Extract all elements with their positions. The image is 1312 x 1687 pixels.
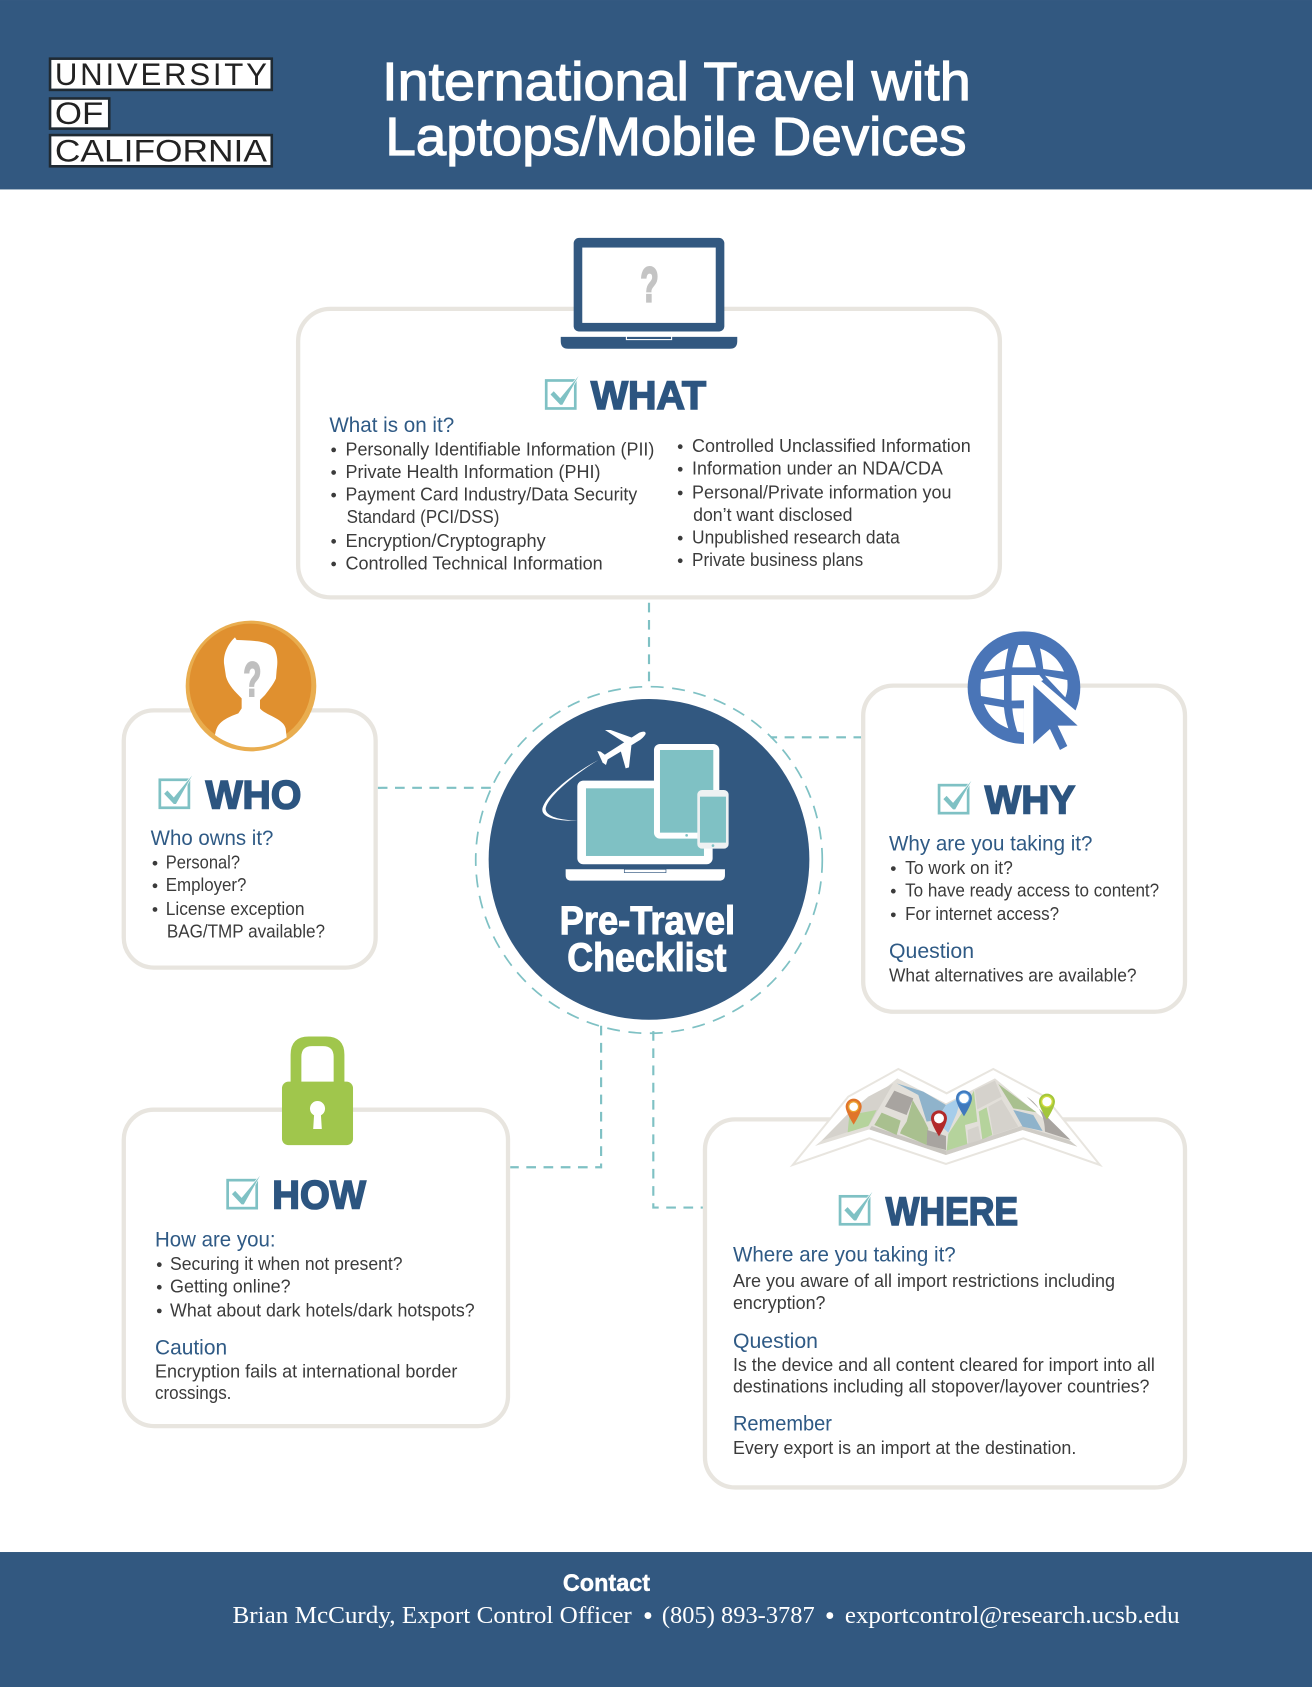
icon: globe with cursor bbox=[968, 631, 1087, 750]
how caution: Encryption fails at international border bbox=[155, 1361, 457, 1382]
what list: right column: Information under an NDA/CDA bbox=[692, 458, 944, 479]
who subheading: Who owns it? bbox=[151, 826, 273, 850]
who panel frame bbox=[124, 710, 376, 968]
where question bbox=[733, 1329, 1155, 1397]
connector: who to centre bbox=[378, 787, 491, 789]
footer contact text: (805) 893-3787 bbox=[662, 1602, 815, 1629]
who list: BAG/TMP available? bbox=[167, 920, 325, 941]
why heading: WHY bbox=[985, 779, 1075, 823]
icon: laptop with question mark: ? bbox=[640, 257, 659, 312]
what list: right column: don’t want disclosed bbox=[693, 504, 852, 525]
how list: What about dark hotels/dark hotspots? bbox=[170, 1299, 475, 1320]
what list: left column: Payment Card Industry/Data Security bbox=[345, 483, 638, 504]
why list: For internet access? bbox=[905, 903, 1059, 924]
what list: right column: Unpublished research data bbox=[692, 527, 901, 548]
what list: left column: Controlled Technical Information bbox=[345, 552, 603, 573]
why subheading: Why are you taking it? bbox=[889, 832, 1092, 856]
what list: left column bbox=[331, 438, 654, 573]
connector: how to centre bbox=[510, 1026, 601, 1167]
logo: University of California bbox=[50, 57, 272, 168]
why heading bbox=[939, 779, 1075, 823]
what list: left column: Private Health Information (PHI) bbox=[345, 461, 601, 482]
where subheading and text: Are you aware of all import restrictions including bbox=[733, 1270, 1115, 1291]
what list: right column: Personal/Private information you bbox=[692, 481, 951, 502]
title: International Travel with bbox=[382, 52, 971, 112]
badge disc bbox=[489, 699, 809, 1020]
how heading: HOW bbox=[272, 1174, 366, 1218]
how list bbox=[157, 1253, 475, 1320]
footer contact text bbox=[232, 1571, 1180, 1629]
connector: where to centre bbox=[653, 1031, 704, 1208]
icon: folded map with pins bbox=[793, 1069, 1100, 1165]
panel: why bbox=[863, 631, 1185, 1012]
icon: plane and devices bbox=[542, 730, 729, 881]
where heading: WHERE bbox=[886, 1190, 1018, 1234]
title bbox=[382, 52, 971, 167]
what heading: WHAT bbox=[591, 374, 706, 418]
where question: destinations including all stopover/layover countries? bbox=[733, 1376, 1149, 1397]
icon: person with question mark: ? bbox=[243, 653, 261, 707]
footer contact text: Contact bbox=[563, 1571, 650, 1597]
header band bbox=[0, 0, 1312, 189]
what list: left column: Personally Identifiable Information (PII) bbox=[345, 438, 654, 459]
what list: right column bbox=[678, 435, 971, 570]
where question: Question bbox=[733, 1329, 818, 1353]
what list: right column: Controlled Unclassified Information bbox=[692, 435, 971, 456]
logo: University of California: UNIVERSITY bbox=[55, 57, 267, 92]
how list: Getting online? bbox=[170, 1276, 291, 1297]
why question bbox=[889, 939, 1137, 986]
who heading: WHO bbox=[206, 773, 301, 817]
icon: padlock bbox=[282, 1036, 353, 1145]
why question: Question bbox=[889, 939, 974, 963]
centre badge: pre-travel checklist bbox=[476, 687, 822, 1033]
how heading bbox=[228, 1174, 366, 1218]
what list: right column: Private business plans bbox=[692, 549, 863, 570]
where remember: Remember bbox=[733, 1412, 832, 1436]
where subheading and text: encryption? bbox=[733, 1292, 826, 1313]
panel: what bbox=[298, 238, 1000, 597]
what panel frame bbox=[298, 309, 1000, 597]
why list: To work on it? bbox=[905, 857, 1013, 878]
badge label bbox=[560, 899, 735, 980]
panel: how bbox=[124, 1036, 508, 1426]
what list: left column: Encryption/Cryptography bbox=[345, 530, 547, 551]
title: Laptops/Mobile Devices bbox=[385, 107, 967, 167]
logo: University of California: OF bbox=[55, 96, 103, 131]
connector: what to centre bbox=[648, 603, 650, 685]
icon: person with question mark bbox=[186, 621, 316, 751]
why question: What alternatives are available? bbox=[889, 965, 1137, 986]
badge label: Pre-Travel bbox=[560, 899, 735, 943]
how caution: crossings. bbox=[155, 1382, 231, 1403]
what list: left column: Standard (PCI/DSS) bbox=[347, 506, 499, 527]
who heading bbox=[160, 773, 301, 817]
where subheading and text: Where are you taking it? bbox=[733, 1243, 956, 1267]
who list: Employer? bbox=[166, 874, 246, 895]
panel: who bbox=[124, 621, 376, 968]
how list: Securing it when not present? bbox=[170, 1253, 403, 1274]
where heading bbox=[840, 1190, 1018, 1234]
what subheading: What is on it? bbox=[329, 413, 454, 437]
footer contact text: Brian McCurdy, Export Control Officer bbox=[232, 1602, 632, 1629]
where subheading and text bbox=[733, 1243, 1115, 1313]
icon: laptop with question mark bbox=[561, 238, 737, 349]
who list: License exception bbox=[166, 898, 305, 919]
how caution bbox=[155, 1335, 457, 1403]
how caution: Caution bbox=[155, 1335, 227, 1359]
where remember: Every export is an import at the destination. bbox=[733, 1437, 1076, 1458]
where question: Is the device and all content cleared for import into all bbox=[733, 1354, 1155, 1375]
panel: where bbox=[705, 1069, 1185, 1487]
why list: To have ready access to content? bbox=[905, 880, 1159, 901]
how panel frame bbox=[124, 1110, 508, 1426]
logo: University of California: CALIFORNIA bbox=[55, 133, 267, 168]
where panel frame bbox=[705, 1119, 1185, 1487]
footer band bbox=[0, 1552, 1312, 1687]
why panel frame bbox=[863, 686, 1185, 1012]
connector: why to centre bbox=[771, 736, 863, 738]
badge label: Checklist bbox=[567, 936, 726, 980]
who list bbox=[153, 852, 325, 941]
why list bbox=[891, 857, 1159, 924]
how subheading: How are you: bbox=[155, 1228, 276, 1252]
where remember bbox=[733, 1412, 1076, 1458]
dashed ring bbox=[476, 687, 822, 1033]
who list: Personal? bbox=[166, 852, 240, 873]
footer contact text: exportcontrol@research.ucsb.edu bbox=[845, 1602, 1180, 1629]
